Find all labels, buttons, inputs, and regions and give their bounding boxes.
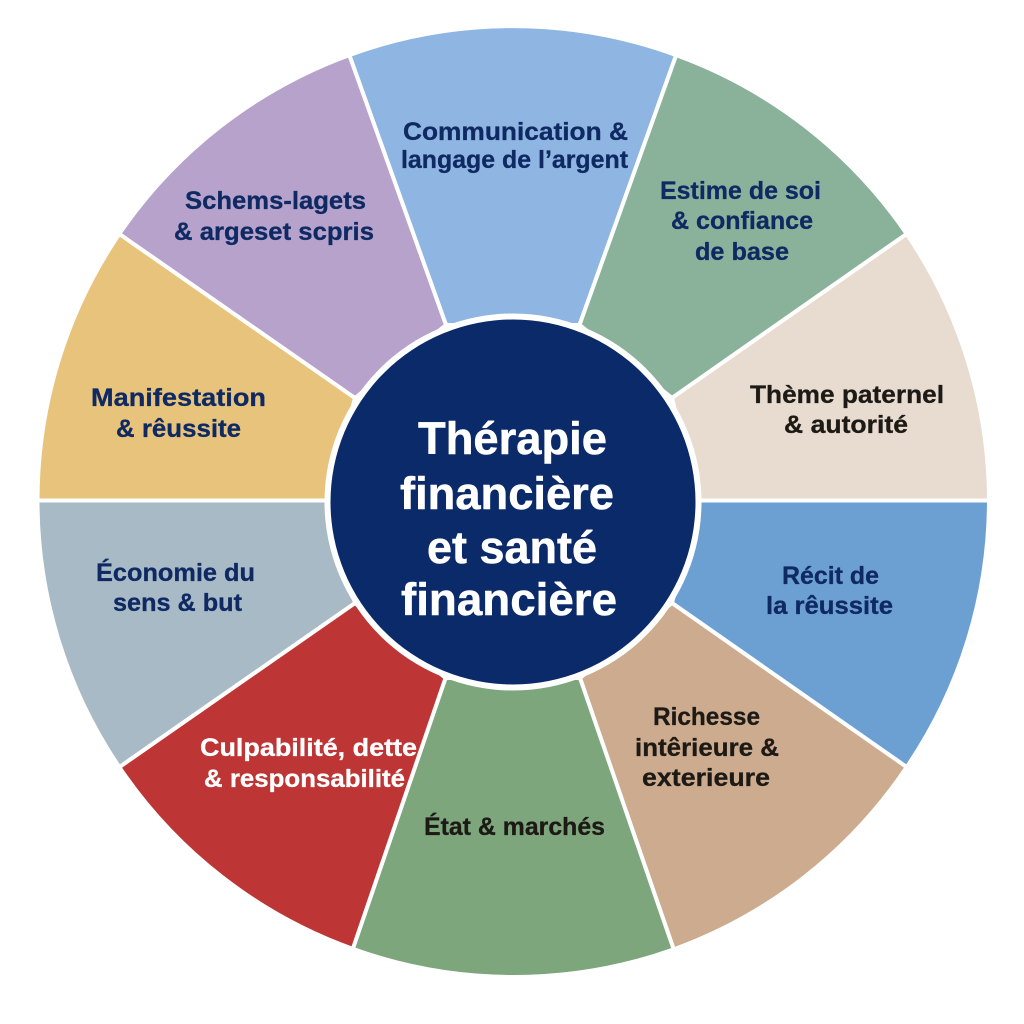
segment: État et marchés: État & marchés <box>424 812 605 841</box>
segment: État et marchés <box>353 678 674 977</box>
segment: Schems-lagets: & argeset scpris <box>174 218 374 246</box>
center hub: financière <box>400 468 614 519</box>
segment: Manifestation et réussite: & rêussite <box>116 415 241 443</box>
segment: Culpabilité, dette et responsabilité <box>119 603 446 949</box>
segment: Récit de la réussite: la rêussite <box>766 592 893 620</box>
segment: Communication et langage de l'argent <box>349 26 676 325</box>
segment: Richesse intérieure et extérieure: Richesse <box>653 703 760 731</box>
segment: Économie du sens et but: sens & but <box>113 589 243 617</box>
segment: Culpabilité, dette et responsabilité: Culpabilité, dette <box>200 734 417 762</box>
segment: Richesse intérieure et extérieure: intêrieure & <box>635 734 779 762</box>
segment: Estime de soi et confiance de base <box>580 55 907 398</box>
center hub: financière <box>401 574 617 625</box>
segment: Manifestation et réussite <box>38 234 355 500</box>
segment: Schems-lagets <box>119 55 446 398</box>
segment: Économie du sens et but: Économie du <box>96 558 255 587</box>
segment: Schems-lagets: Schems-lagets <box>185 187 366 215</box>
segment: Récit de la réussite <box>672 500 989 767</box>
segment: Communication et langage de l'argent: langage de l’argent <box>401 146 629 174</box>
segment: Richesse intérieure et extérieure <box>580 603 907 949</box>
segment: Culpabilité, dette et responsabilité: & responsabilité <box>204 765 405 793</box>
center hub <box>324 314 702 690</box>
segment: Thème paternel et autorité: Thème paternel <box>750 381 944 409</box>
segment: Richesse intérieure et extérieure: exterieure <box>642 764 770 792</box>
segment: Thème paternel et autorité <box>672 234 989 500</box>
segment: Estime de soi et confiance de base: & confiance <box>671 207 813 235</box>
segment: Estime de soi et confiance de base: de base <box>695 238 789 266</box>
segment: Économie du sens et but <box>38 500 355 767</box>
segment: Thème paternel et autorité: & autorité <box>784 411 908 439</box>
segment: Estime de soi et confiance de base: Estime de soi <box>660 177 821 205</box>
segment: Communication et langage de l'argent: Communication & <box>403 118 628 146</box>
center hub: et santé <box>427 522 597 573</box>
center hub: Thérapie <box>418 413 607 464</box>
segment: Manifestation et réussite: Manifestation <box>91 384 266 412</box>
segment: Récit de la réussite: Récit de <box>782 562 879 590</box>
